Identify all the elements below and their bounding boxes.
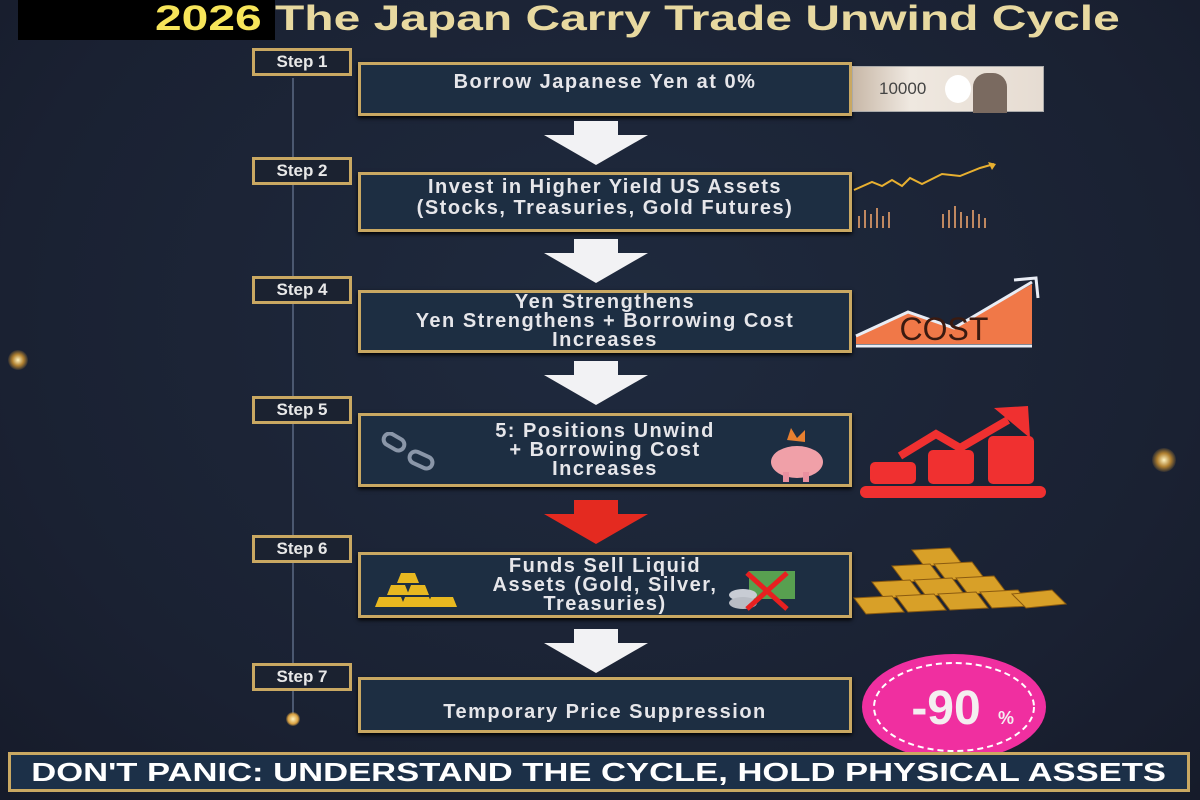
step 7 label: Step 7 bbox=[276, 667, 328, 686]
badge: -90%: % bbox=[998, 708, 1014, 728]
arrow 1 bbox=[544, 121, 648, 165]
step 7 label bbox=[252, 663, 352, 691]
icon: yen banknote: 10000 bbox=[879, 79, 926, 98]
box 4: Yen Strengthens + Borrowing Cost bbox=[416, 310, 794, 332]
bottom banner: DON'T PANIC: UNDERSTAND THE CYCLE, HOLD PHYSICAL ASSETS bbox=[32, 757, 1166, 787]
icon: cost chart: COST bbox=[900, 311, 988, 347]
box 7 bbox=[358, 677, 852, 733]
box 5 bbox=[358, 413, 852, 487]
box 5: + Borrowing Cost bbox=[509, 438, 701, 460]
timeline line bbox=[292, 78, 294, 718]
title bar bbox=[18, 0, 275, 40]
box 7: Temporary Price Suppression bbox=[443, 700, 767, 722]
box 5: 5: Positions Unwind bbox=[495, 420, 715, 442]
step 5 label: Step 5 bbox=[276, 400, 328, 419]
icon: cash crossed bbox=[729, 571, 795, 611]
step 4 label bbox=[252, 276, 352, 304]
step 1 label: Step 1 bbox=[276, 52, 328, 71]
box 6: Assets (Gold, Silver, bbox=[493, 574, 717, 596]
glow dot left bbox=[8, 350, 28, 370]
icon: yen banknote bbox=[852, 66, 1044, 112]
box 2: Invest in Higher Yield US Assets bbox=[428, 176, 782, 198]
arrow 2 bbox=[544, 239, 648, 283]
step 2 label bbox=[252, 157, 352, 185]
icon: broken chain bbox=[382, 432, 434, 470]
icon: gold bar pile bbox=[853, 548, 1067, 614]
badge: -90%: -90 bbox=[911, 682, 981, 735]
box 6: Treasuries) bbox=[543, 592, 667, 614]
box 2: (Stocks, Treasuries, Gold Futures) bbox=[417, 197, 793, 219]
icon: red bar chart bbox=[860, 406, 1046, 498]
icon: small gold bars bbox=[375, 573, 457, 607]
icon: rising chart bbox=[854, 162, 996, 228]
icon: cost chart bbox=[855, 276, 1040, 348]
box 6 bbox=[358, 552, 852, 618]
badge: -90% bbox=[862, 654, 1046, 752]
title: 2026 The Japan Carry Trade Unwind Cycle bbox=[155, 0, 1120, 38]
arrow 5 bbox=[544, 629, 648, 673]
box 6: Funds Sell Liquid bbox=[509, 554, 701, 576]
icon: piggy bank bbox=[771, 428, 823, 482]
step 4 label: Step 4 bbox=[276, 280, 328, 299]
glow dot right bbox=[1152, 448, 1176, 472]
step 6 label bbox=[252, 535, 352, 563]
arrow 3 bbox=[544, 361, 648, 405]
step 2 label: Step 2 bbox=[276, 161, 328, 180]
box 4: Increases bbox=[552, 329, 658, 351]
arrow 4 red bbox=[544, 500, 648, 544]
box 2 bbox=[358, 172, 852, 232]
step 5 label bbox=[252, 396, 352, 424]
box 4 bbox=[358, 290, 852, 353]
box 1: Borrow Japanese Yen at 0% bbox=[454, 70, 756, 92]
step 1 label bbox=[252, 48, 352, 76]
box 4: Yen Strengthens bbox=[515, 291, 695, 313]
step 6 label: Step 6 bbox=[276, 539, 328, 558]
box 5: Increases bbox=[552, 458, 658, 480]
glow dot bbox=[286, 712, 300, 726]
box 1 bbox=[358, 62, 852, 116]
